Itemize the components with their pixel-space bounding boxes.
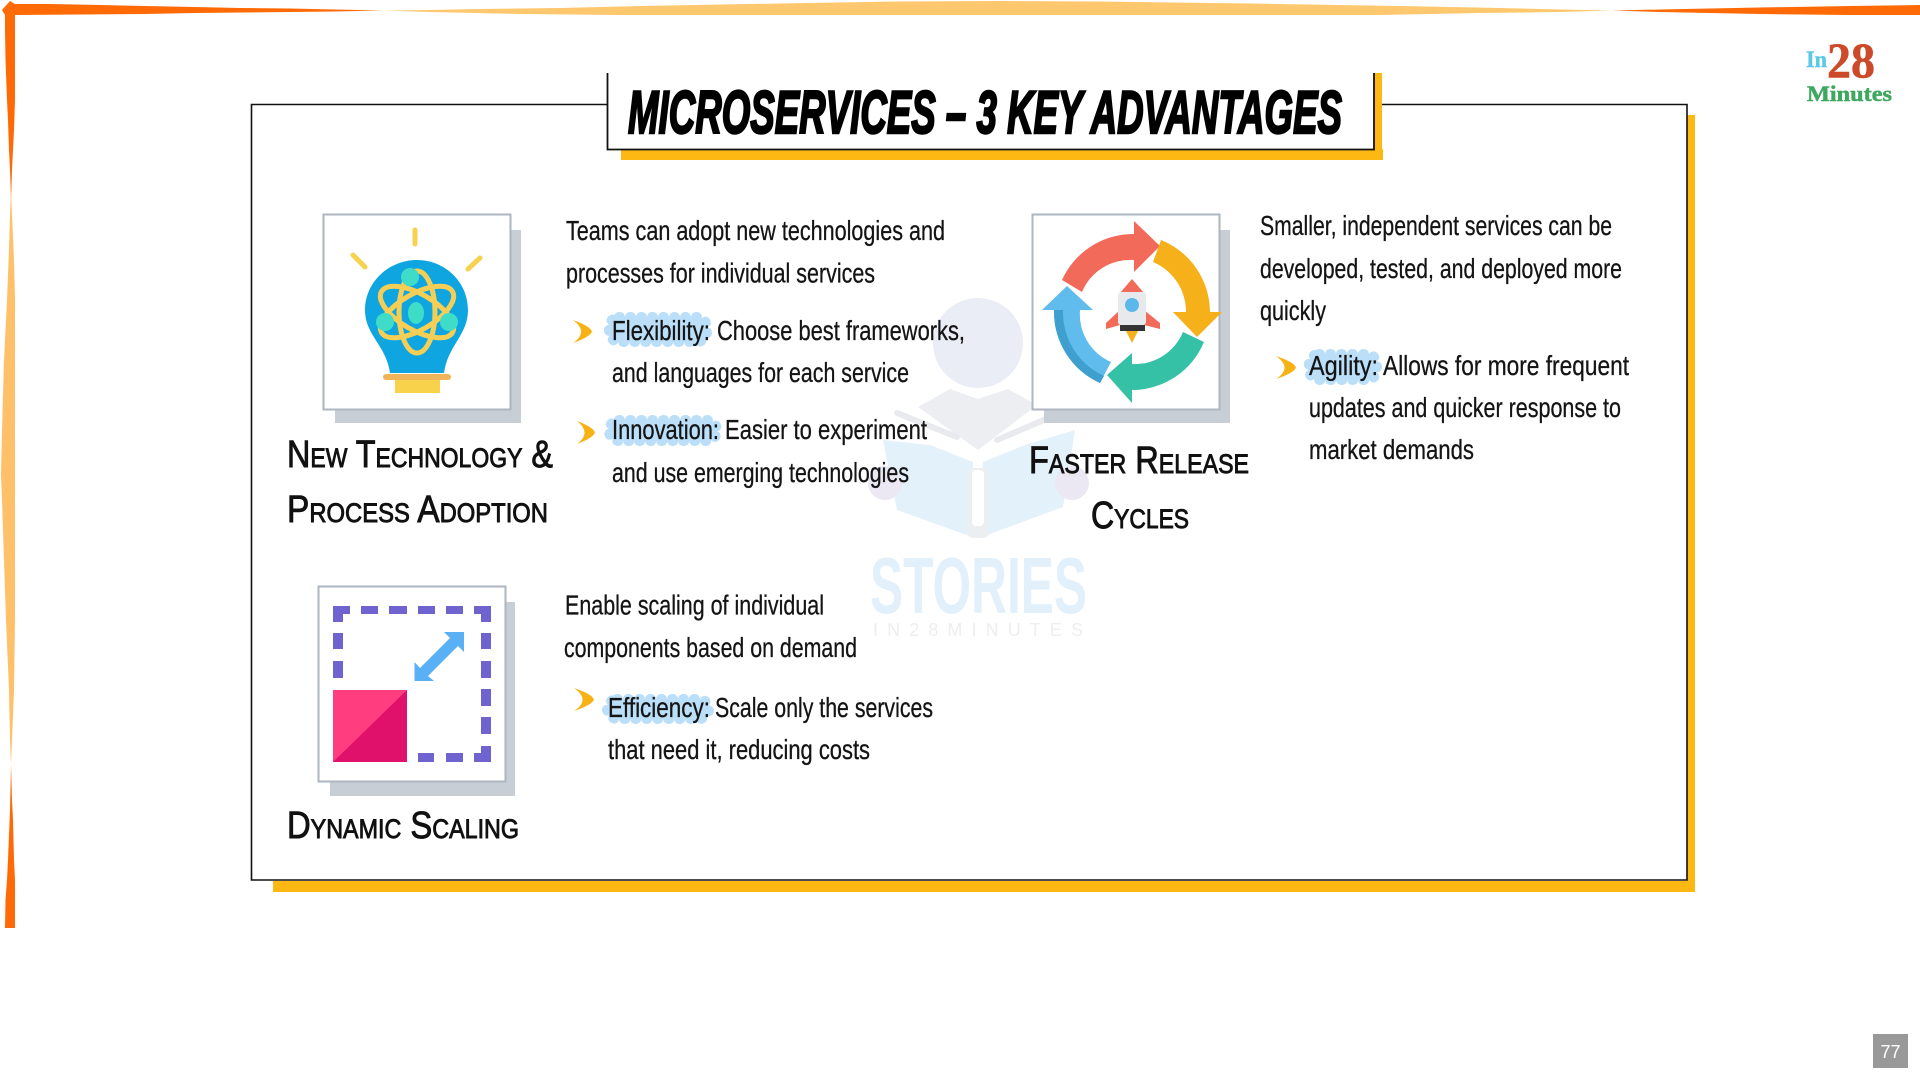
- panel: new technology and process adoption: [287, 214, 965, 531]
- title text: MICROSERVICES – 3 KEY ADVANTAGES: [628, 79, 1342, 146]
- bullet: innovation: Easier to experiment: [725, 414, 927, 445]
- main panel frame: [252, 104, 1695, 892]
- icon: scaling square: [318, 586, 515, 796]
- description: [564, 590, 857, 663]
- logo: in28minutes: [1806, 32, 1892, 106]
- bullet: flexibility: and languages for each service: [612, 357, 909, 388]
- icon: light bulb with atom: [324, 214, 521, 423]
- description: quickly: [1260, 295, 1326, 326]
- bullet: efficiency: Efficiency:: [608, 692, 710, 723]
- heading: process adoption: Process Adoption: [287, 489, 548, 531]
- description: [1260, 210, 1622, 326]
- panel: faster release cycles: [1029, 210, 1629, 537]
- bullet: efficiency: [574, 688, 933, 765]
- bullet: agility: [1276, 350, 1629, 465]
- icon: release cycle arrows with rocket: [1032, 214, 1230, 423]
- bullet: agility: Agility:: [1309, 350, 1378, 381]
- bullet: efficiency: Scale only the services: [715, 692, 933, 723]
- heading: new technology: New Technology &: [287, 434, 553, 476]
- bullet: innovation: [577, 414, 927, 488]
- watermark book: [868, 413, 1089, 538]
- watermark head: [933, 298, 1023, 388]
- page number: 77: [1880, 1042, 1901, 1062]
- logo: in28minutes: Minutes: [1807, 81, 1892, 106]
- page number: [1873, 1034, 1908, 1068]
- decorative left border: [1, 190, 15, 928]
- decorative top border: [2, 1, 1920, 200]
- watermark: Stories in28minutes: [868, 298, 1089, 640]
- bullet: flexibility: Flexibility:: [612, 315, 710, 346]
- description: components based on demand: [564, 632, 857, 663]
- heading: dynamic scaling: Dynamic Scaling: [287, 805, 519, 847]
- heading: faster release: Faster Release: [1029, 440, 1249, 482]
- logo: in28minutes: 28: [1827, 32, 1875, 88]
- title banner: [607, 73, 1383, 160]
- description: [566, 215, 945, 288]
- description: processes for individual services: [566, 258, 875, 288]
- bullet: flexibility: Choose best frameworks,: [717, 315, 965, 346]
- description: Teams can adopt new technologies and: [566, 215, 945, 246]
- heading: cycles: Cycles: [1091, 495, 1189, 537]
- watermark shoulders: [918, 389, 1037, 450]
- bullet: agility: updates and quicker response to: [1309, 392, 1621, 423]
- bullet: flexibility: [573, 315, 965, 388]
- logo: in28minutes: In: [1806, 47, 1827, 72]
- bullet: efficiency: that need it, reducing costs: [608, 734, 870, 765]
- bullet: innovation: and use emerging technologies: [612, 457, 909, 488]
- description: Smaller, independent services can be: [1260, 210, 1612, 241]
- bullet: agility: market demands: [1309, 434, 1474, 465]
- bullet: innovation: Innovation:: [612, 414, 719, 445]
- watermark word: STORIES: [870, 541, 1087, 630]
- description: developed, tested, and deployed more: [1260, 253, 1622, 284]
- description: Enable scaling of individual: [565, 590, 824, 620]
- bullet: agility: Allows for more frequent: [1383, 350, 1629, 381]
- watermark subtitle: IN28MINUTES: [873, 620, 1083, 640]
- panel: dynamic scaling: [287, 586, 933, 847]
